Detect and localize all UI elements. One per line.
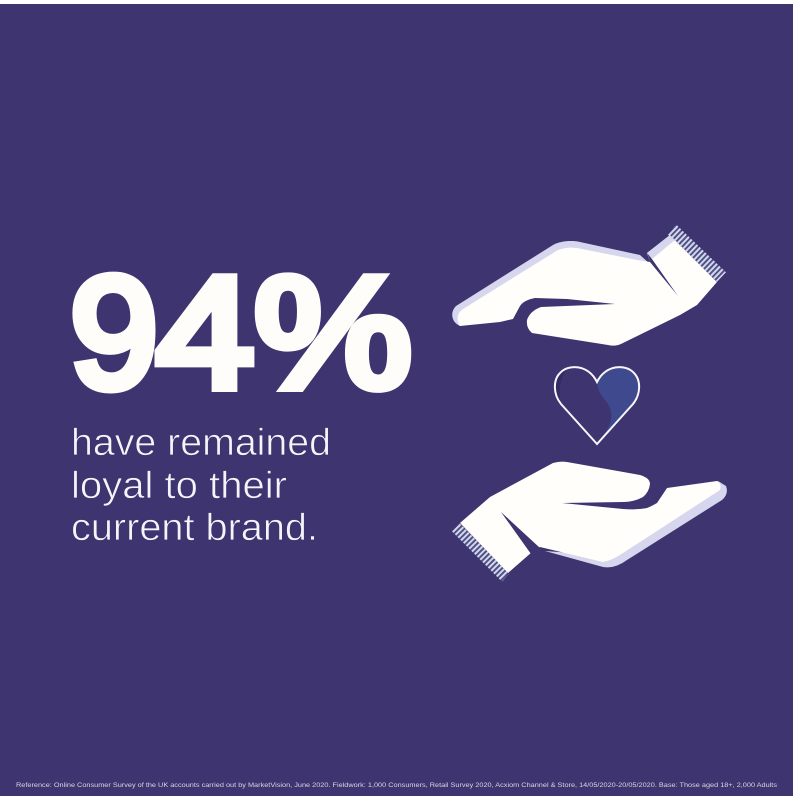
- footnote: survey reference: Reference: Online Consumer Survey of the UK accounts carried out by MarketVision, June 2020. Fieldwork: 1,000 Consumers, Retail Survey 2020, Acxiom Channel & Store, 14/05/2020-20/05/2020. Base: Those aged 18+, 2,000 Adults: [16, 783, 777, 789]
- icon: heart: [555, 367, 639, 444]
- text block: loyalty statement: current brand.: [71, 507, 318, 549]
- headline statistic: 94%: %: [254, 245, 412, 421]
- icon: upper hand: [452, 225, 726, 346]
- icon: lower hand: [452, 462, 727, 582]
- text block: loyalty statement: have remained: [71, 422, 331, 464]
- text block: loyalty statement: loyal to their: [71, 465, 287, 507]
- text block: loyalty statement: [71, 422, 331, 549]
- headline statistic: 94%: [70, 245, 412, 421]
- headline statistic: 94%: 4: [156, 245, 254, 421]
- headline statistic: 94%: 9: [70, 245, 158, 421]
